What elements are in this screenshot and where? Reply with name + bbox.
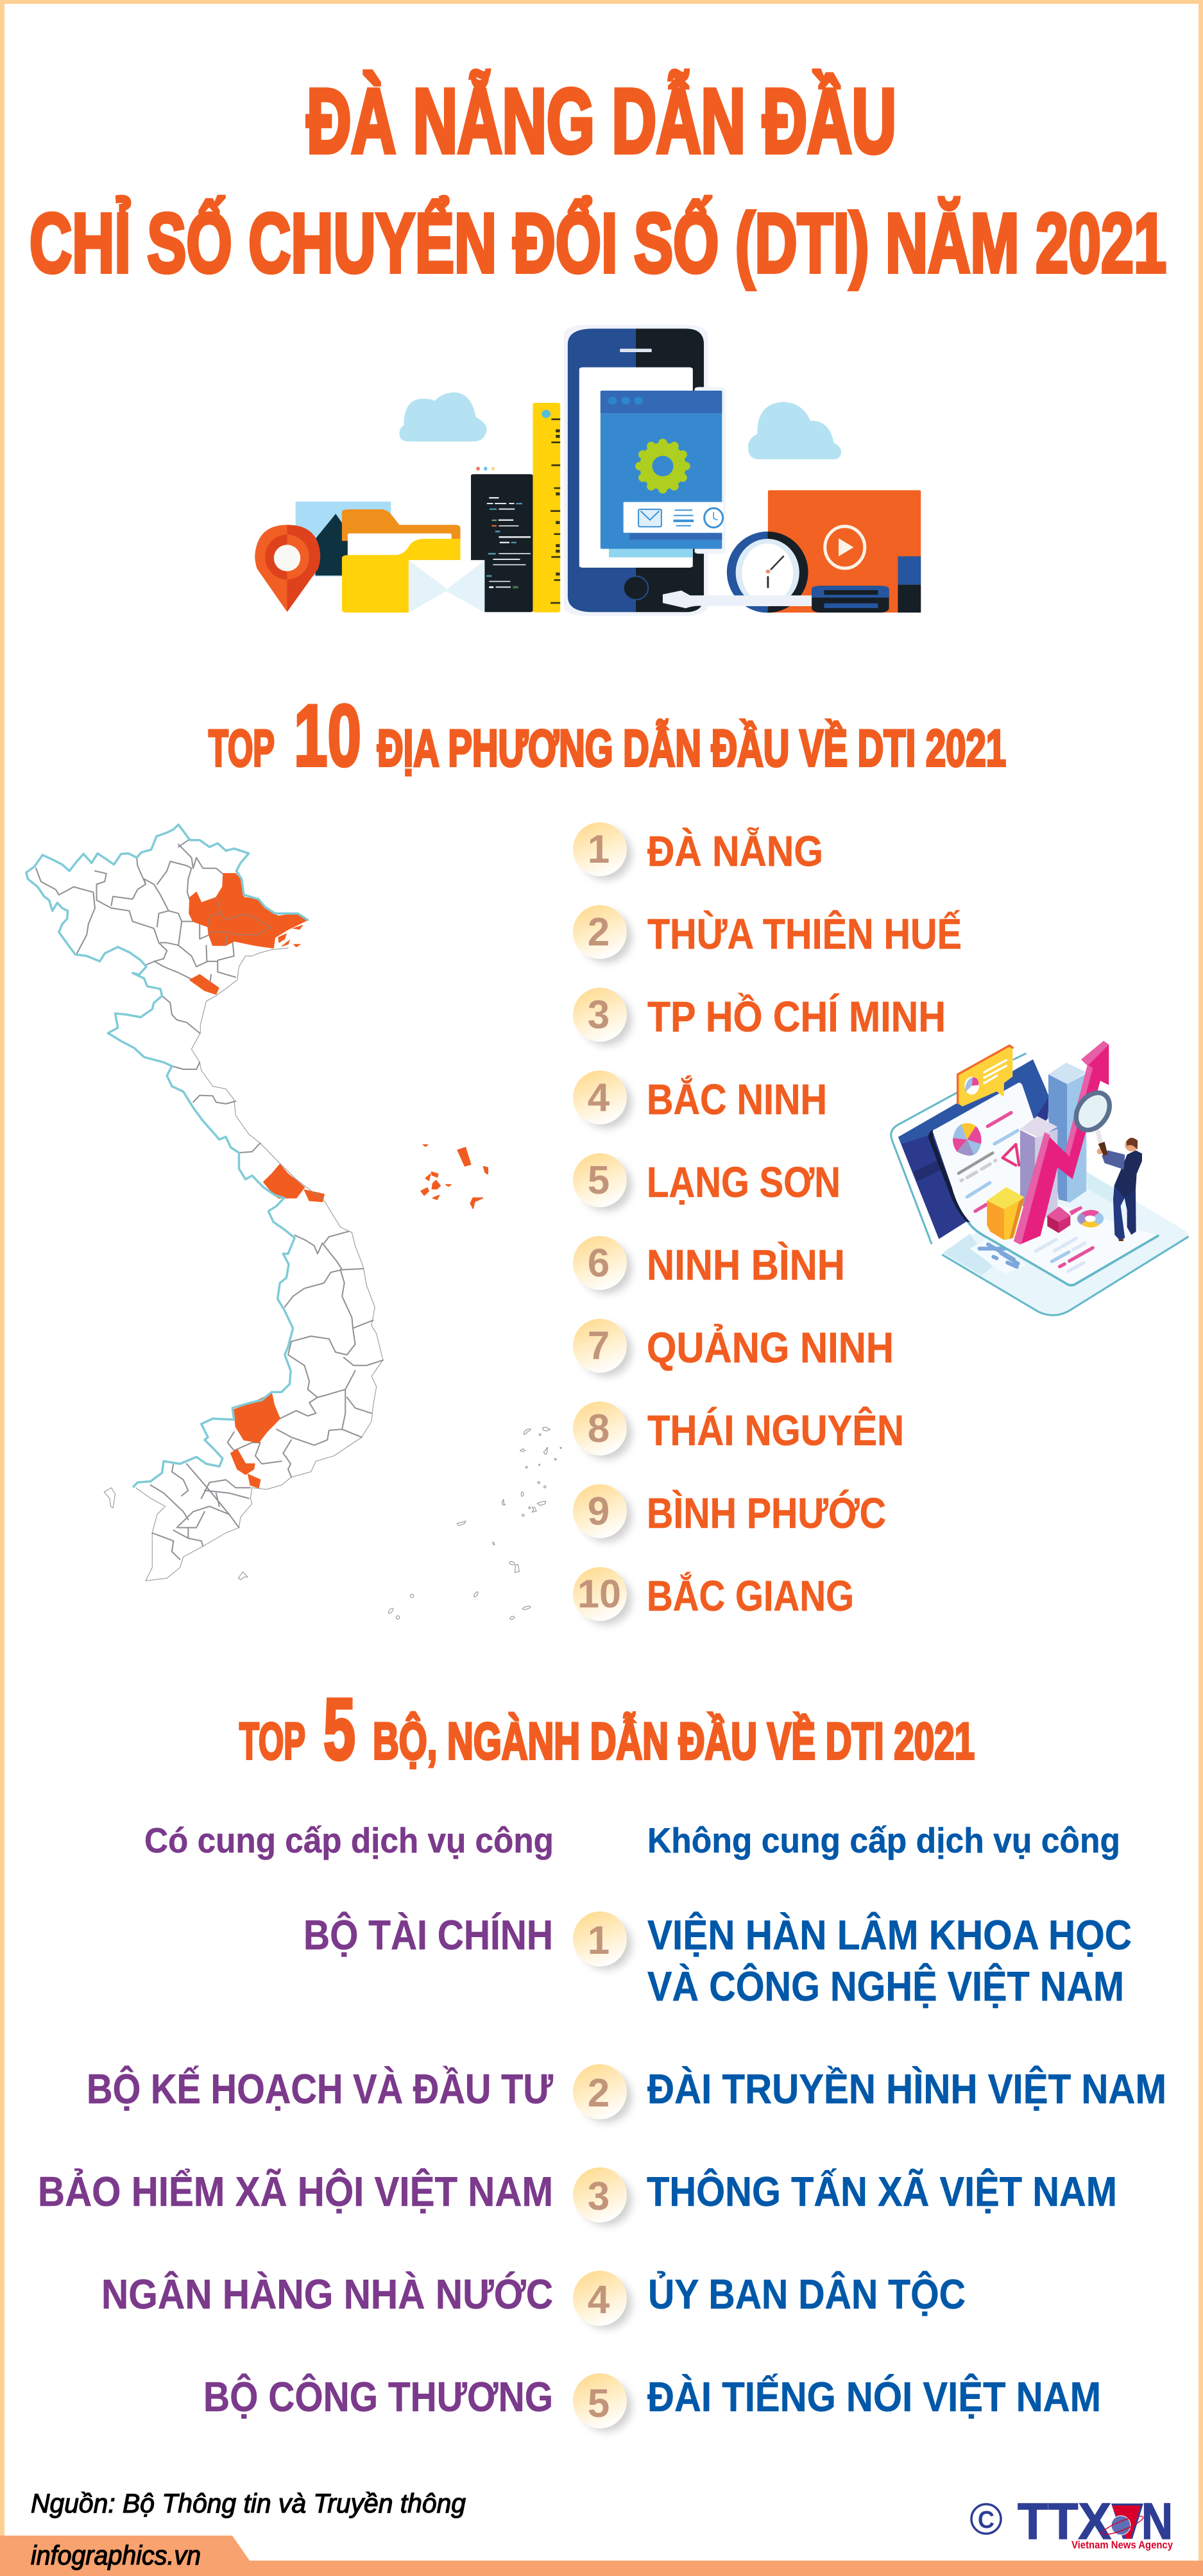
rank 1: VIỆN HÀN LÂM KHOA HỌC xyxy=(647,1911,1132,1958)
title line 1: ĐÀ NẴNG DẪN ĐẦU xyxy=(307,71,896,172)
rank 2: 2 xyxy=(588,2071,610,2115)
rank 9 xyxy=(573,1484,886,1542)
blue bar xyxy=(1048,1063,1086,1203)
rank 8 xyxy=(573,1402,904,1459)
map of Vietnam xyxy=(26,825,488,1580)
rank 5: 5 xyxy=(588,2382,610,2426)
rank 2: BỘ KẾ HOẠCH VÀ ĐẦU TƯ xyxy=(87,2065,553,2112)
laptop lid and screen xyxy=(891,1054,1049,1243)
national border xyxy=(26,825,308,1487)
rank 3: BẢO HIỂM XÃ HỘI VIỆT NAM xyxy=(38,2168,553,2215)
logo: TTXVN: N xyxy=(1141,2493,1173,2550)
rank 6 xyxy=(573,1236,845,1294)
northern province cluster: Thái Nguyên, Lạng Sơn, Bắc Giang, Bắc Ninh, Quảng Ninh xyxy=(189,874,308,948)
province: Bình Phước xyxy=(234,1394,280,1443)
list: top 10 localities xyxy=(573,822,962,1625)
province: Đà Nẵng xyxy=(304,1190,324,1201)
province borders xyxy=(36,839,383,1559)
rank 10: BẮC GIANG xyxy=(647,1572,854,1620)
donut chart xyxy=(1077,1210,1104,1228)
rank 3 xyxy=(573,988,946,1046)
rank 3: 3 xyxy=(588,993,610,1037)
rank 6: NINH BÌNH xyxy=(647,1241,845,1289)
rank 7: QUẢNG NINH xyxy=(647,1324,894,1372)
list: top 5 ministries xyxy=(38,1911,1166,2432)
rank 4: BẮC NINH xyxy=(647,1076,827,1124)
rank 6: 6 xyxy=(588,1241,610,1285)
rank 7 xyxy=(573,1319,894,1377)
speech bubble xyxy=(958,1046,1012,1106)
rank 1: ĐÀ NẴNG xyxy=(647,827,823,876)
archipelago: Trường Sa xyxy=(388,1427,561,1620)
rank 5: ĐÀI TIẾNG NÓI VIỆT NAM xyxy=(647,2373,1101,2420)
logo: TTXVN: Vietnam News Agency xyxy=(1071,2539,1173,2551)
rank 3: 3 xyxy=(588,2174,610,2219)
rank 1: BỘ TÀI CHÍNH xyxy=(303,1911,553,1958)
heading: top 10 localities: 10 xyxy=(294,686,361,784)
rank 1: 1 xyxy=(588,827,610,872)
province: Ninh Bình xyxy=(190,974,219,994)
heading: top 10 localities: TOP xyxy=(209,720,275,777)
rank 9: BÌNH PHƯỚC xyxy=(647,1489,886,1538)
man with magnifier xyxy=(1070,1087,1142,1241)
rank 2: THỪA THIÊN HUẾ xyxy=(647,910,962,958)
rank 5 xyxy=(573,1153,840,1211)
coastline xyxy=(136,948,383,1580)
rank 7: 7 xyxy=(588,1324,610,1368)
icon: envelope xyxy=(409,560,484,613)
archipelago: Hoàng Sa xyxy=(421,1145,488,1208)
laptop base xyxy=(943,1172,1189,1315)
rank 3: TP HỒ CHÍ MINH xyxy=(647,993,946,1041)
rank 5: LẠNG SƠN xyxy=(647,1158,840,1207)
icon: video panel xyxy=(768,490,921,613)
icon: app window with gear xyxy=(601,387,726,557)
icon: map pin xyxy=(255,525,320,612)
rank 5 xyxy=(203,2373,1101,2432)
footer band xyxy=(0,2536,1203,2576)
icon: gauge xyxy=(727,532,808,613)
column header: with public services: Có cung cấp dịch vụ công xyxy=(144,1820,554,1860)
column header: without public services: Không cung cấp dịch vụ công xyxy=(647,1820,1120,1860)
title xyxy=(30,71,1166,290)
rank 1 xyxy=(573,822,823,880)
province: TP Hồ Chí Minh xyxy=(231,1450,260,1487)
icon: cloud left xyxy=(399,393,487,441)
rank 8: 8 xyxy=(588,1407,610,1451)
rank 9: 9 xyxy=(588,1489,610,1534)
rank 10: 10 xyxy=(577,1572,621,1616)
logo: TTXVN: C xyxy=(978,2507,994,2534)
highlighted provinces xyxy=(189,874,324,1487)
heading: top 5 ministries xyxy=(239,1681,975,1778)
panel: mail and clock icons xyxy=(624,502,723,539)
logo: TTXVN: TTX xyxy=(1018,2493,1111,2550)
source note: Nguồn: Bộ Thông tin và Truyền thông xyxy=(31,2488,466,2518)
illustration: phone, apps and devices xyxy=(255,325,921,616)
pie chart xyxy=(953,1123,982,1156)
icon: screwdriver xyxy=(663,586,889,613)
website label: infographics.vn xyxy=(31,2540,201,2570)
rank 2 xyxy=(87,2064,1166,2123)
rank 3 xyxy=(38,2167,1117,2226)
purple bar xyxy=(1020,1116,1057,1221)
icon: picture behind folder xyxy=(296,502,391,577)
rank 4: NGÂN HÀNG NHÀ NƯỚC xyxy=(101,2271,553,2318)
icon: cloud right xyxy=(748,402,841,459)
document page xyxy=(933,1083,1158,1285)
heading: top 5 ministries: TOP xyxy=(239,1713,305,1770)
rank 1: VÀ CÔNG NGHỆ VIỆT NAM xyxy=(647,1963,1124,2010)
rank 1: 1 xyxy=(588,1919,610,1963)
rank 4: ỦY BAN DÂN TỘC xyxy=(648,2271,966,2318)
heading: top 5 ministries: 5 xyxy=(323,1681,355,1778)
illustration: analyst with laptop and charts xyxy=(891,1041,1189,1315)
icon: ruler xyxy=(533,403,560,613)
rank 4: 4 xyxy=(588,1076,610,1120)
icon: phone xyxy=(564,325,708,616)
heading: top 10 localities xyxy=(209,686,1006,784)
rank 1 xyxy=(303,1911,1132,2010)
rank 5: 5 xyxy=(588,1158,610,1203)
icon: code panel xyxy=(471,467,533,612)
pink box xyxy=(1047,1206,1082,1233)
rank 4 xyxy=(101,2271,966,2329)
logo: TTXVN xyxy=(971,2493,1173,2551)
rank 3: THÔNG TẤN XÃ VIỆT NAM xyxy=(647,2168,1117,2215)
icon: folder xyxy=(342,509,461,613)
rank 4: 4 xyxy=(588,2278,610,2322)
rank 4 xyxy=(573,1071,827,1128)
rank 5: BỘ CÔNG THƯƠNG xyxy=(203,2373,553,2420)
islands: Phú Quốc and Côn Đảo xyxy=(104,1487,248,1580)
rank 2: 2 xyxy=(588,910,610,954)
rank 10 xyxy=(573,1567,854,1625)
province: Thừa Thiên Huế xyxy=(264,1164,304,1198)
rank 8: THÁI NGUYÊN xyxy=(647,1407,904,1455)
rising arrow xyxy=(1014,1041,1109,1244)
icon: gear xyxy=(635,439,690,493)
rank 2 xyxy=(573,905,962,963)
yellow box xyxy=(987,1187,1025,1240)
